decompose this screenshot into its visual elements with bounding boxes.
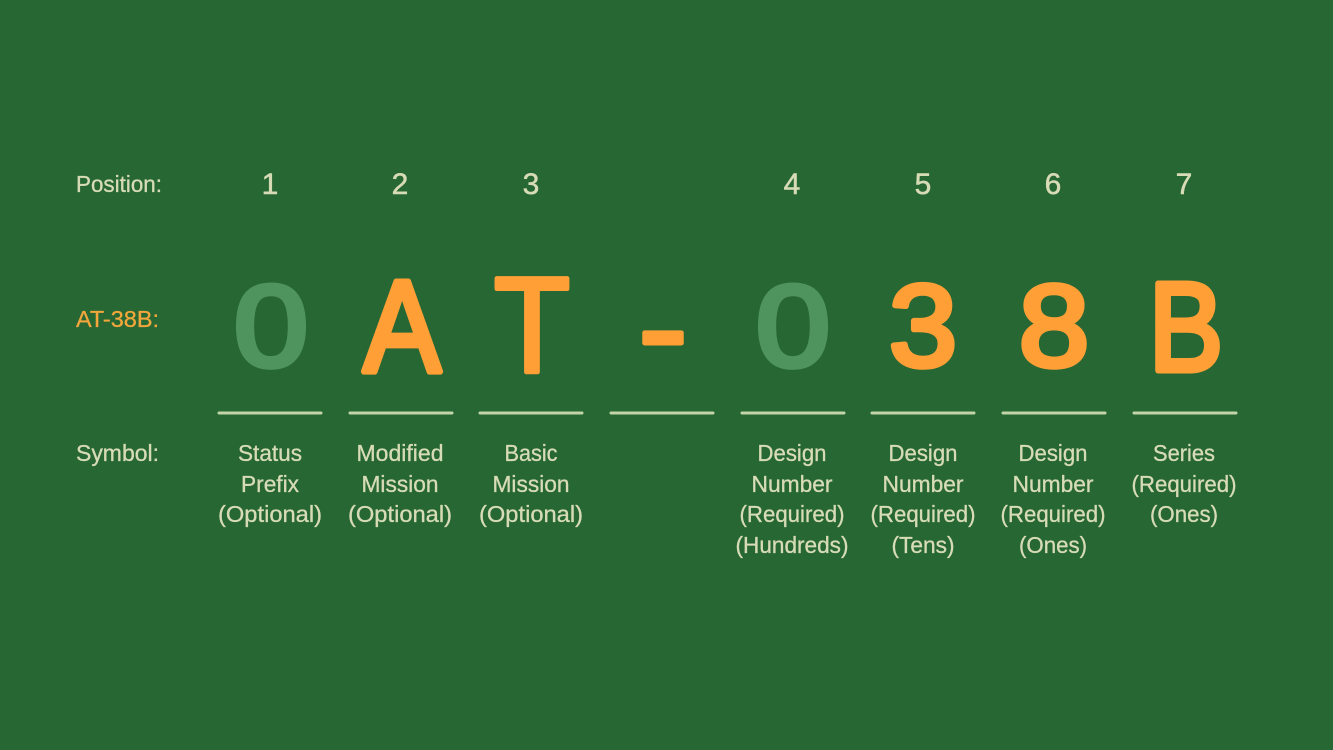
description: modified mission: (Optional) [348,501,452,527]
symbol: 8: 8 [1019,261,1089,391]
symbol: dash: - [638,252,688,403]
position numbers: 1 [262,168,278,201]
description: design number tens: (Required) [870,501,976,527]
symbol: empty hundreds 0: 0 [756,262,830,391]
description: design number tens: (Tens) [892,532,954,558]
position numbers: 2 [392,168,408,201]
position numbers: 6 [1045,168,1061,201]
description: series [1132,440,1236,527]
description: design number ones: Number [1012,471,1094,497]
row label: AT-38B: AT-38B: [76,306,159,332]
description: status prefix: Prefix [241,471,299,497]
description: modified mission [348,440,452,527]
description: design number ones: Design [1018,440,1088,466]
description: design number hundreds: Number [752,471,833,497]
description: series: (Ones) [1150,501,1218,527]
description: basic mission: (Optional) [479,501,583,527]
description: design number ones: (Ones) [1019,532,1087,558]
description: status prefix: Status [238,440,302,466]
symbol: A: A [363,254,441,400]
description: status prefix [218,440,322,527]
description: status prefix: (Optional) [218,501,322,527]
description: basic mission: Basic [504,440,558,466]
position numbers: 3 [523,168,539,201]
description: basic mission: Mission [492,471,570,497]
description: design number tens: Design [888,440,958,466]
description: design number hundreds: (Required) [740,501,844,527]
description: series: (Required) [1132,471,1236,497]
position numbers: 4 [784,168,800,201]
symbol: T: T [494,249,570,401]
description: modified mission: Modified [356,440,444,466]
designation symbols [234,249,1223,403]
description: series: Series [1153,440,1215,466]
symbol: 3: 3 [889,262,957,391]
description: design number tens [870,440,976,558]
position numbers: 7 [1176,168,1192,201]
description: design number ones [1000,440,1106,558]
description: basic mission [479,440,583,527]
description: design number tens: Number [882,471,964,497]
row label: position: Position: [76,171,162,197]
description: modified mission: Mission [362,471,438,497]
position numbers [262,168,1192,201]
description: design number hundreds: Design [758,440,826,466]
underlines [219,412,1236,414]
symbol: empty status prefix 0: 0 [234,262,308,391]
description: design number hundreds [736,440,848,558]
symbol: B: B [1149,257,1223,398]
row label: symbol: Symbol: [76,440,159,466]
position numbers: 5 [915,168,931,201]
description: design number ones: (Required) [1000,501,1106,527]
description: design number hundreds: (Hundreds) [736,532,848,558]
